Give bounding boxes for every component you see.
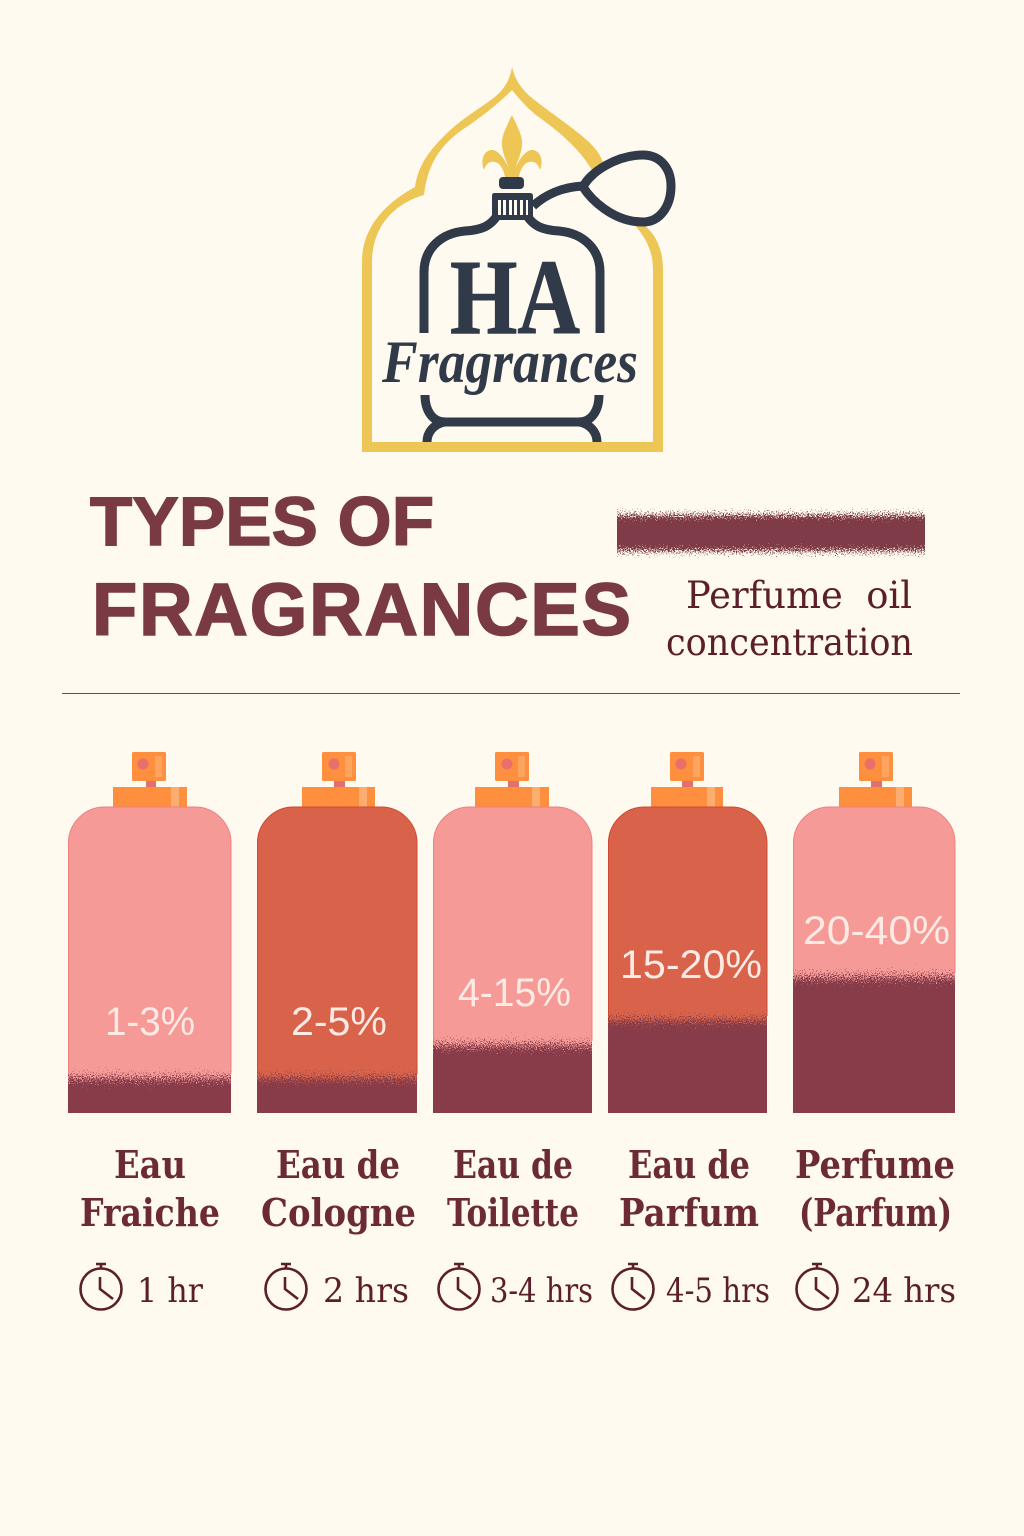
duration: 4-5 hrs <box>666 1271 770 1311</box>
legend text line 2: concentration <box>666 621 913 664</box>
percentage: 15-20% <box>620 943 762 987</box>
heading line 2: FRAGRANCES <box>92 568 631 651</box>
name: Eau de <box>628 1142 750 1187</box>
bottle with oil level <box>608 806 768 1113</box>
icon: stopwatch <box>80 1264 122 1310</box>
spray cap <box>113 752 187 807</box>
name: Fraiche <box>80 1190 220 1235</box>
column: Perfume (Parfum) <box>793 752 956 1311</box>
spray cap <box>839 752 912 807</box>
icon: stopwatch <box>612 1264 654 1310</box>
heading line 1: TYPES OF <box>90 483 434 560</box>
logo: golden arch frame <box>362 67 663 452</box>
logo: perfume bottle <box>424 155 671 442</box>
duration: 2 hrs <box>323 1271 409 1311</box>
icon: stopwatch <box>266 1264 306 1310</box>
duration: 24 hrs <box>852 1271 956 1311</box>
bottle with oil level <box>68 806 232 1113</box>
name: (Parfum) <box>799 1190 952 1235</box>
logo: fleur de lis <box>482 115 542 177</box>
percentage: 4-15% <box>458 971 571 1015</box>
percentage: 1-3% <box>105 1000 195 1044</box>
legend text line 1: Perfume oil <box>686 574 912 617</box>
logo: Fragrances lettering: Fragrances <box>381 329 638 395</box>
name: Eau de <box>276 1142 400 1187</box>
column: Eau de Parfum <box>608 752 768 1311</box>
name <box>619 1142 759 1235</box>
column: Eau de Cologne <box>257 752 418 1311</box>
name: Perfume <box>795 1142 955 1187</box>
logo: HA lettering: HA <box>450 239 580 357</box>
name: Toilette <box>447 1190 579 1235</box>
name: Eau <box>114 1142 186 1187</box>
percentage: 2-5% <box>291 1000 387 1044</box>
name: Parfum <box>619 1190 759 1235</box>
name <box>795 1142 955 1235</box>
bottle with oil level <box>433 806 592 1113</box>
name: Eau de <box>453 1142 573 1187</box>
name <box>261 1142 416 1235</box>
bottle with oil level <box>257 806 418 1113</box>
percentage: 20-40% <box>803 909 950 953</box>
spray cap <box>302 752 375 807</box>
column: Eau de Toilette <box>433 752 592 1311</box>
legend: perfume oil concentration <box>617 507 925 656</box>
icon: stopwatch <box>438 1264 480 1310</box>
name <box>80 1142 220 1235</box>
duration: 3-4 hrs <box>490 1271 593 1311</box>
heading <box>90 483 631 651</box>
icon: stopwatch <box>796 1264 838 1310</box>
name: Cologne <box>261 1190 416 1235</box>
name <box>447 1142 579 1235</box>
logo: HA Fragrances <box>362 67 671 452</box>
duration: 1 hr <box>137 1271 204 1311</box>
spray cap <box>475 752 549 807</box>
legend swatch <box>600 515 945 551</box>
spray cap <box>651 752 723 807</box>
column: Eau Fraiche <box>68 752 232 1311</box>
bottle with oil level <box>793 806 956 1113</box>
